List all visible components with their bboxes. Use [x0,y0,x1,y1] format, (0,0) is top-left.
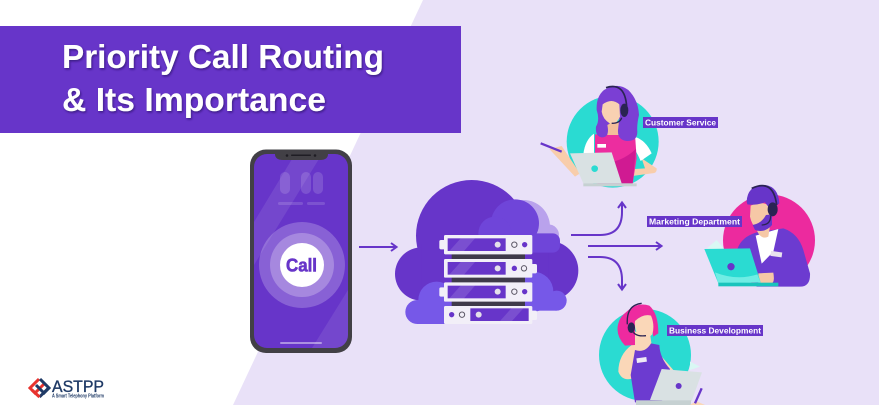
pen [541,143,562,152]
dress shade and badge [598,149,636,183]
neck and face [750,203,771,238]
agent: customer service [541,86,659,188]
server unit 3 [439,282,532,302]
laptop [704,240,778,286]
label: marketing department: Marketing Department [649,216,740,226]
agent: marketing department [704,185,815,287]
server unit 1 [439,235,532,254]
cloud shape [395,180,578,324]
badge [636,357,647,363]
headset [606,87,628,123]
logo name: ASTPP [52,377,104,396]
title text [62,39,384,119]
laptop [570,152,637,186]
badge [770,251,782,257]
agent: business development [599,303,705,405]
shirt [756,229,778,264]
neck [607,122,619,135]
beard [753,214,772,231]
arrow: phone to cloud [359,243,396,251]
teal circle [599,309,691,401]
logo: ASTPP [30,377,104,400]
sleeves and arms [549,134,657,178]
home indicator [280,342,322,344]
arm and neck [618,332,673,379]
hair [596,86,639,141]
title banner [0,26,461,133]
purple dress [631,343,670,402]
call button [259,222,345,308]
face [602,101,620,124]
server unit 4 [444,306,537,324]
label: customer service: Customer Service [645,118,716,128]
lock screen clock digits [278,172,325,205]
logo tagline: A Smart Telephony Platform [52,394,104,400]
headset [752,186,778,225]
teal circle [567,96,659,188]
phone notch [275,152,328,160]
headset [627,303,646,336]
cloud with servers [395,180,578,324]
title text: & Its Importance [62,82,326,119]
arrow: up to customer service [571,202,626,235]
label: business development: Business Development [669,326,761,336]
laptop [636,362,705,405]
background lavender panel [233,0,879,405]
hair [747,185,779,210]
pink dress [595,134,637,183]
phone [250,150,352,353]
logo mark [30,379,49,397]
face [635,315,653,338]
server unit 2 [444,259,537,278]
body [737,228,810,287]
hair [617,305,658,346]
pink circle [723,194,815,286]
title text: Priority Call Routing [62,39,384,76]
server rack spine [452,253,525,307]
arrow: right to marketing department [588,242,662,250]
call button: Call [286,256,317,276]
arrow: down to business development [588,257,626,290]
